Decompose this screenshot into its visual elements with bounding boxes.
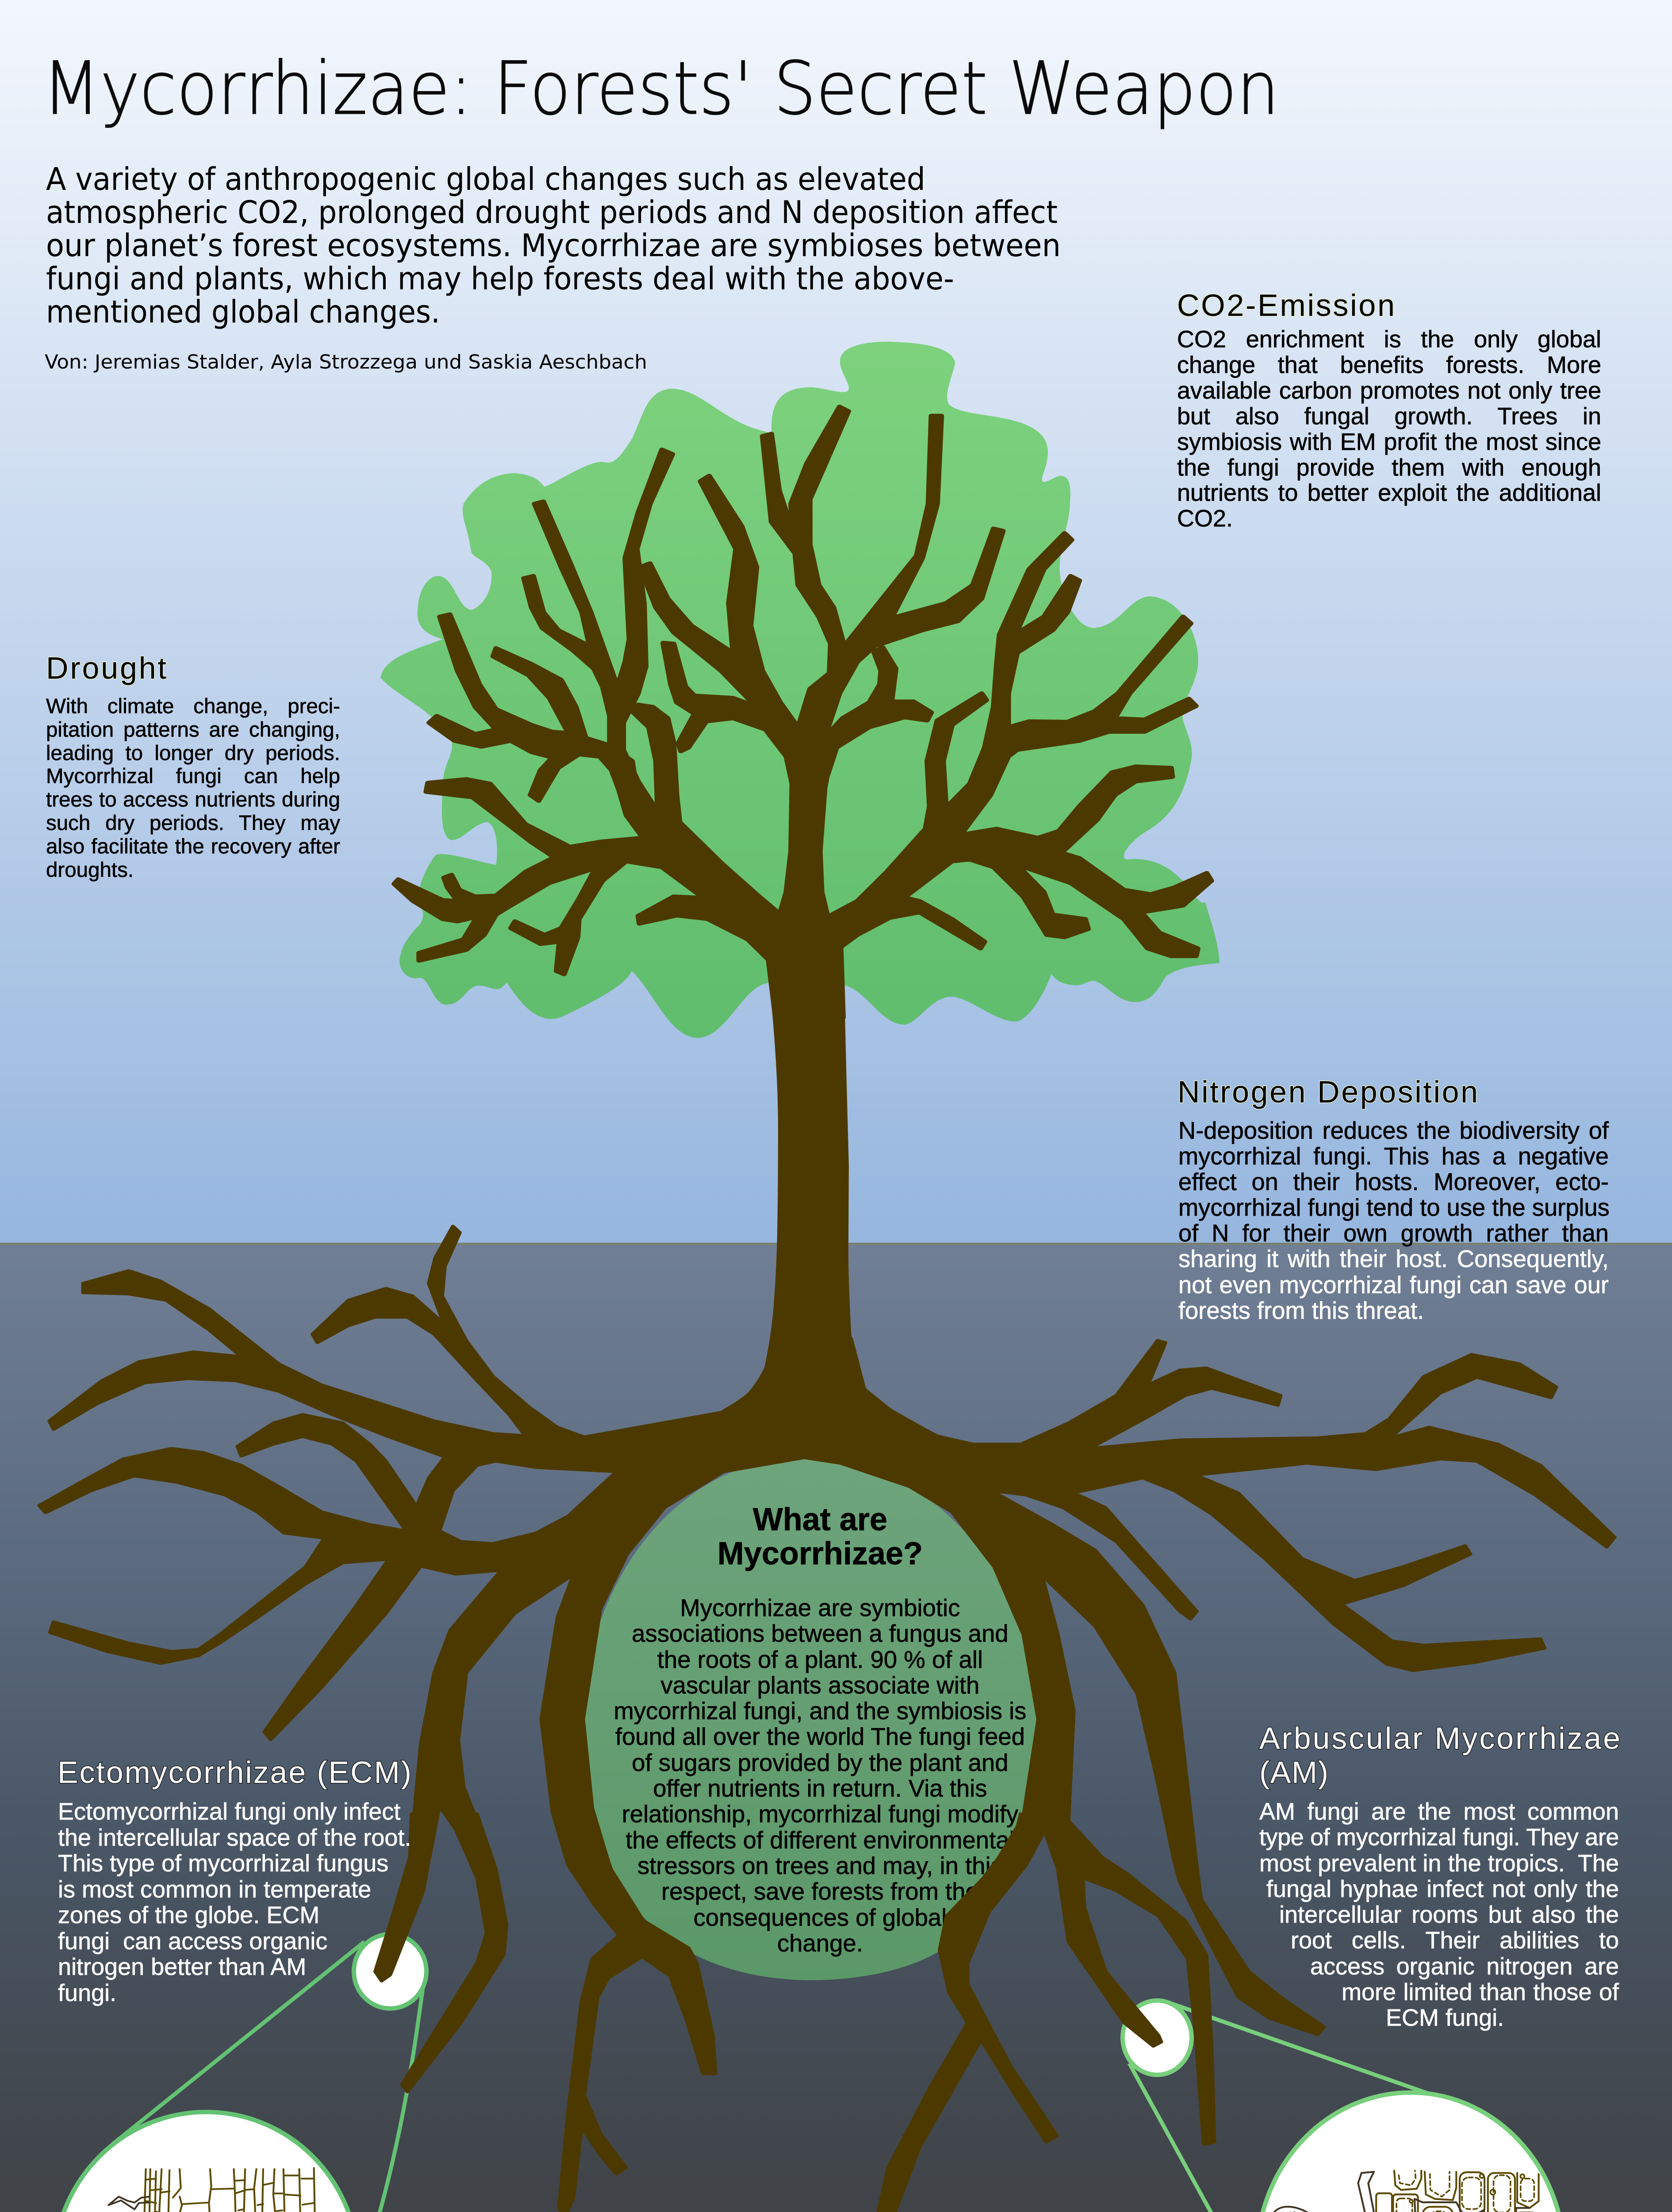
text block: ectomycorrhizae: fungi can access organic bbox=[58, 1928, 327, 1955]
text block: ectomycorrhizae: is most common in temperate bbox=[58, 1876, 371, 1902]
centre body text: relationship, mycorrhizal fungi modify bbox=[622, 1801, 1018, 1828]
AM enlarged root illustration bbox=[1257, 2093, 1565, 2212]
text block: drought: pitation patterns are changing, bbox=[46, 718, 340, 741]
text block: CO2 emission: CO2 enrichment is the only global bbox=[1177, 326, 1601, 353]
intro paragraph bbox=[46, 161, 1061, 330]
text block: nitrogen deposition: N-deposition reduces the biodiversity of bbox=[1178, 1117, 1609, 1144]
text block: nitrogen deposition: of N for their own growth rather than bbox=[1178, 1220, 1609, 1247]
text block: arbuscular mycorrhizae: intercellular rooms but also the bbox=[1279, 1901, 1619, 1928]
centre heading: What are bbox=[753, 1502, 887, 1537]
text block: drought: Mycorrhizal fungi can help bbox=[46, 764, 340, 788]
text block: CO2 emission: nutrients to better exploit the additional bbox=[1177, 480, 1601, 506]
intro paragraph: our planet’s forest ecosystems. Mycorrhizae are symbioses between bbox=[46, 227, 1061, 264]
centre body text: change. bbox=[777, 1930, 863, 1957]
tree trunk bbox=[663, 973, 973, 1456]
centre body text: offer nutrients in return. Via this bbox=[653, 1775, 987, 1802]
ECM fungal hyphae bbox=[70, 2197, 236, 2212]
centre body text: associations between a fungus and bbox=[632, 1620, 1009, 1647]
ECM root-tip circle bbox=[354, 1934, 426, 2008]
AM root-tip circle bbox=[1123, 2001, 1192, 2075]
lower left roots bbox=[375, 1814, 716, 2212]
text block: arbuscular mycorrhizae: access organic nitrogen are bbox=[1310, 1953, 1619, 1980]
text block: ectomycorrhizae: zones of the globe. ECM bbox=[58, 1902, 319, 1928]
centre body text: found all over the world The fungi feed bbox=[615, 1723, 1025, 1750]
text block: nitrogen deposition: mycorrhizal fungi. This has a negative bbox=[1178, 1143, 1609, 1170]
text block: nitrogen deposition: not even mycorrhizal fungi can save our bbox=[1178, 1271, 1609, 1298]
centre body text: mycorrhizal fungi, and the symbiosis is bbox=[614, 1697, 1026, 1724]
text block: CO2 emission: CO2. bbox=[1177, 505, 1233, 532]
green centre oval bbox=[583, 1458, 1038, 1980]
intro paragraph: mentioned global changes. bbox=[46, 294, 440, 330]
text block: arbuscular mycorrhizae: ECM fungi. bbox=[1386, 2005, 1504, 2031]
soil background bbox=[0, 1244, 1672, 2212]
heading: arbuscular mycorrhizae: (AM) bbox=[1259, 1755, 1328, 1790]
text block: CO2 emission bbox=[1177, 327, 1601, 532]
text block: arbuscular mycorrhizae: more limited than those of bbox=[1342, 1979, 1619, 2005]
text block: arbuscular mycorrhizae: fungal hyphae infect not only the bbox=[1266, 1876, 1619, 1902]
tree branches bbox=[394, 407, 1212, 1018]
text block: ectomycorrhizae: Ectomycorrhizal fungi only infect bbox=[58, 1798, 400, 1825]
text block: ectomycorrhizae: nitrogen better than AM bbox=[58, 1954, 306, 1980]
text block: nitrogen deposition: forests from this threat. bbox=[1178, 1297, 1424, 1324]
authors line: Von: Jeremias Stalder, Ayla Strozzega und Saskia Aeschbach bbox=[45, 351, 647, 373]
text block: drought: such dry periods. They may bbox=[46, 811, 340, 835]
text block: arbuscular mycorrhizae: AM fungi are the most common bbox=[1259, 1798, 1619, 1825]
panel: what are mycorrhizae bbox=[555, 1503, 1085, 1967]
heading: arbuscular mycorrhizae: Arbuscular Mycorrhizae bbox=[1259, 1721, 1620, 1755]
lower right roots bbox=[875, 1814, 1324, 2212]
title: Mycorrhizae: Forests' Secret Weapon bbox=[42, 46, 1279, 131]
heading: nitrogen deposition: Nitrogen Deposition bbox=[1177, 1075, 1478, 1109]
text block: arbuscular mycorrhizae bbox=[1259, 1799, 1619, 2031]
intro paragraph: A variety of anthropogenic global changes such as elevated bbox=[46, 161, 925, 197]
text block: arbuscular mycorrhizae: root cells. Their abilities to bbox=[1291, 1927, 1619, 1954]
text block: drought: droughts. bbox=[46, 858, 134, 882]
AM cell cytoplasm dashes bbox=[1396, 2171, 1535, 2212]
intro paragraph: fungi and plants, which may help forests deal with the above- bbox=[46, 261, 954, 297]
intro paragraph: atmospheric CO2, prolonged drought periods and N deposition affect bbox=[46, 194, 1058, 230]
centre body text bbox=[555, 1595, 1085, 1956]
heading: arbuscular mycorrhizae bbox=[1259, 1721, 1620, 1790]
text block: nitrogen deposition: mycorrhizal fungi tend to use the surplus bbox=[1178, 1194, 1610, 1221]
AM cell nuclei bbox=[1410, 2174, 1534, 2212]
left roots bbox=[39, 1226, 840, 1858]
text block: ectomycorrhizae: the intercellular space of the root. bbox=[58, 1824, 411, 1851]
AM fungal hyphae and spore bbox=[1262, 2172, 1530, 2212]
AM root cells bbox=[1376, 2171, 1540, 2212]
ECM root cell walls bbox=[140, 2168, 316, 2212]
text block: CO2 emission: the fungi provide them with enough bbox=[1177, 454, 1601, 481]
centre body text: vascular plants associate with bbox=[661, 1672, 979, 1699]
AM magnifier connectors bbox=[1129, 2004, 1464, 2212]
text block: arbuscular mycorrhizae: type of mycorrhizal fungi. They are bbox=[1259, 1824, 1619, 1851]
text block: ectomycorrhizae: This type of mycorrhizal fungus bbox=[58, 1850, 388, 1877]
centre body text: stressors on trees and may, in this bbox=[637, 1852, 1003, 1879]
text block: ectomycorrhizae: fungi. bbox=[58, 1979, 116, 2006]
centre body text: the effects of different environmental bbox=[625, 1827, 1015, 1854]
heading: drought: Drought bbox=[46, 651, 166, 685]
heading: ectomycorrhizae: Ectomycorrhizae (ECM) bbox=[58, 1755, 411, 1790]
text block: CO2 emission: change that benefits forests. More bbox=[1177, 352, 1601, 378]
ECM enlarged root illustration bbox=[54, 2112, 358, 2212]
text block: nitrogen deposition: effect on their hosts. Moreover, ecto- bbox=[1178, 1168, 1609, 1195]
centre body text: respect, save forests from the bbox=[661, 1878, 979, 1905]
text block: ectomycorrhizae bbox=[58, 1799, 412, 2006]
right roots bbox=[804, 1338, 1615, 1858]
text block: nitrogen deposition bbox=[1178, 1118, 1609, 1324]
text block: nitrogen deposition: sharing it with their host. Consequently, bbox=[1178, 1245, 1609, 1272]
sky background bbox=[0, 0, 1672, 1244]
text block: CO2 emission: symbiosis with EM profit the most since bbox=[1177, 429, 1601, 455]
text block: arbuscular mycorrhizae: most prevalent in the tropics. The bbox=[1259, 1850, 1619, 1877]
centre heading bbox=[555, 1503, 1085, 1571]
text block: CO2 emission: but also fungal growth. Trees in bbox=[1177, 403, 1601, 430]
text block: drought: With climate change, preci- bbox=[46, 695, 340, 718]
text block: drought bbox=[46, 695, 340, 882]
text block: CO2 emission: available carbon promotes not only tree bbox=[1177, 377, 1601, 404]
centre body text: the roots of a plant. 90 % of all bbox=[657, 1646, 983, 1673]
tree crown foliage bbox=[380, 342, 1219, 1038]
centre body text: Mycorrhizae are symbiotic bbox=[680, 1594, 960, 1621]
heading: CO2 emission: CO2-Emission bbox=[1177, 288, 1395, 323]
text block: drought: leading to longer dry periods. bbox=[46, 741, 340, 765]
text block: drought: trees to access nutrients during bbox=[46, 788, 340, 811]
centre body text: of sugars provided by the plant and bbox=[632, 1749, 1009, 1776]
centre body text: consequences of global bbox=[694, 1904, 947, 1931]
ECM magnifier connectors bbox=[112, 1942, 423, 2212]
text block: drought: also facilitate the recovery after bbox=[46, 835, 340, 858]
centre heading: Mycorrhizae? bbox=[717, 1536, 923, 1571]
